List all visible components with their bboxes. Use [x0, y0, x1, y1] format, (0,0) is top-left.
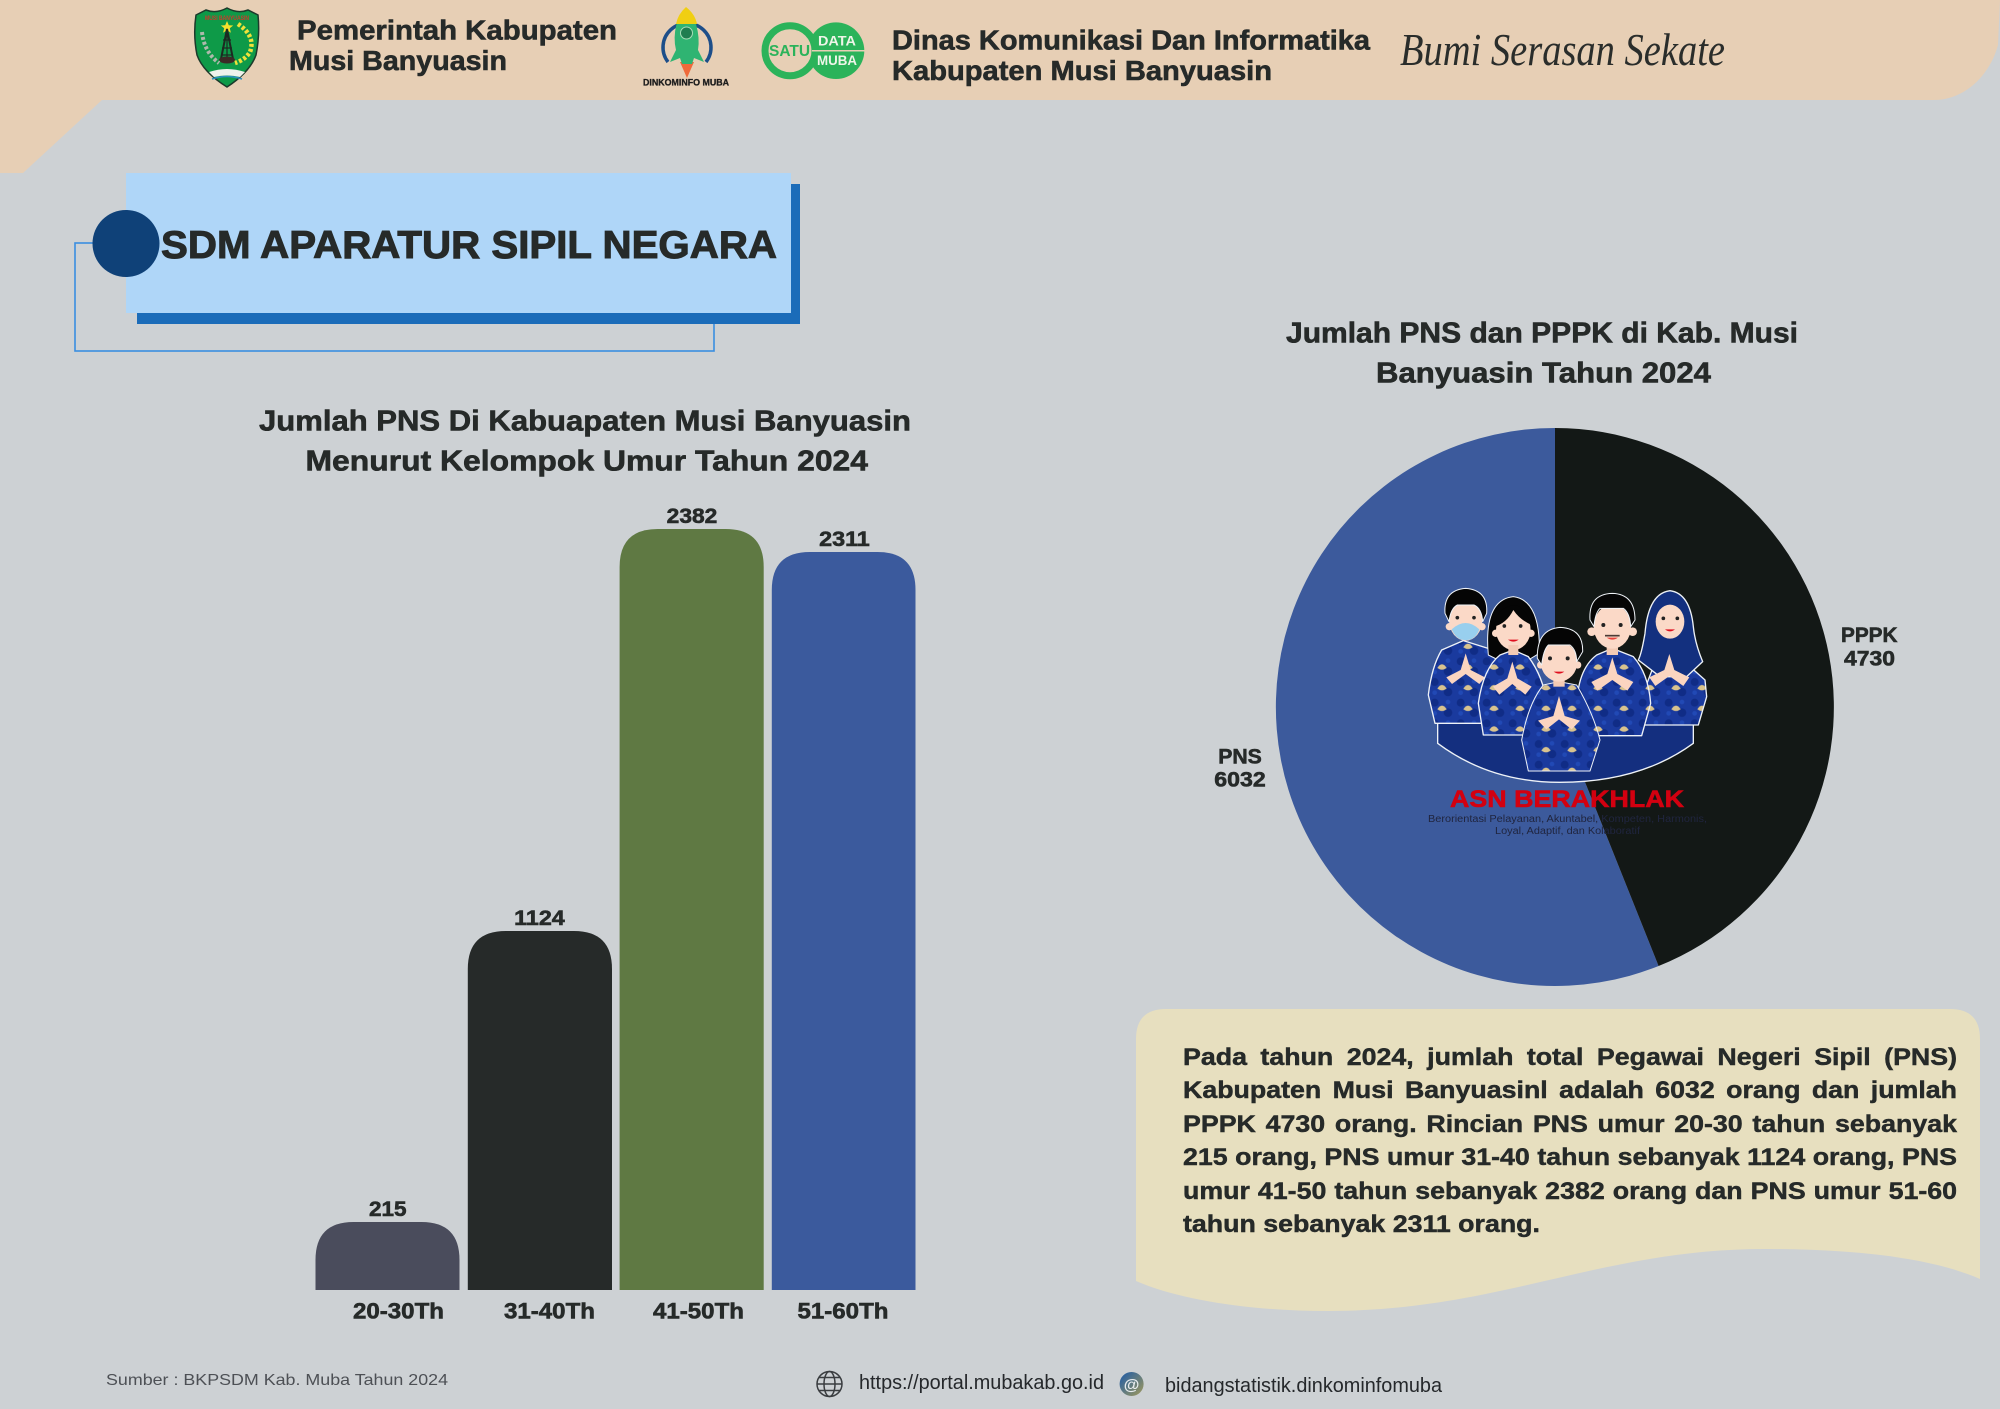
heading: pie chart title: Banyuasin Tahun 2024	[1376, 358, 1711, 390]
icon: Dinkominfo rocket: DINKOMINFO MUBA	[643, 78, 729, 88]
icon: Musi Banyuasin shield	[195, 8, 259, 87]
label: PNS	[1214, 744, 1266, 792]
icon: at sign: @	[1124, 1377, 1139, 1394]
icon: Satu Data Muba	[765, 22, 865, 79]
text block: summary paragraph: Kabupaten Musi Banyuasinl adalah 6032 orang dan jumlah	[1183, 1077, 1957, 1104]
icon: at sign	[1120, 1372, 1144, 1396]
header text: Pemerintah Kabupaten: Pemerintah Kabupaten	[297, 14, 617, 46]
slice: PPPK	[1555, 428, 1834, 966]
label: PNS: PNS	[1218, 744, 1262, 768]
bar 51-60Th: 51-60Th	[798, 1298, 888, 1324]
icon: Satu Data Muba: MUBA	[817, 52, 857, 68]
heading: bar chart title: Menurut Kelompok Umur Tahun 2024	[306, 446, 868, 478]
slice: PNS	[1276, 428, 1659, 986]
bar 41-50Th	[620, 505, 764, 1324]
header motto: Bumi Serasan Sekate	[1400, 24, 1725, 75]
bar 20-30Th: 215	[369, 1198, 407, 1221]
header text: Dinas Komunikasi dan Informatika: Dinas Komunikasi Dan Informatika	[892, 24, 1370, 56]
text block: summary paragraph: PPPK 4730 orang. Rincian PNS umur 20-30 tahun sebanyak	[1183, 1111, 1957, 1138]
bar 31-40Th: 1124	[514, 907, 565, 930]
text block: summary paragraph: umur 41-50 tahun sebanyak 2382 orang dan PNS umur 51-60	[1183, 1178, 1957, 1205]
figure: front man	[1522, 627, 1600, 771]
base	[1438, 717, 1693, 782]
figure: man with moustache	[1577, 593, 1651, 736]
heading: bar chart title: Jumlah PNS Di Kabuapaten Musi Banyuasin	[259, 406, 911, 438]
label: ASN Berakhlak caption	[1428, 786, 1707, 837]
text block: summary paragraph: tahun sebanyak 2311 orang.	[1183, 1211, 1540, 1238]
icon: Dinkominfo rocket	[643, 7, 729, 88]
text block: summary paragraph: 215 orang, PNS umur 31-40 tahun sebanyak 1124 orang, PNS	[1183, 1144, 1957, 1171]
header text: Dinas Komunikasi dan Informatika: Kabupaten Musi Banyuasin	[892, 55, 1272, 86]
panel: main title banner: SDM APARATUR SIPIL NEGARA	[161, 224, 777, 267]
header text: Pemerintah Kabupaten: Musi Banyuasin	[289, 45, 507, 76]
heading: bar chart title	[259, 406, 911, 478]
bar 51-60Th: 2311	[819, 528, 870, 551]
footer source: Sumber : BKPSDM Kab. Muba Tahun 2024	[106, 1372, 448, 1389]
label: ASN Berakhlak caption: Loyal, Adaptif, dan Kolaboratif	[1495, 826, 1640, 837]
text block: summary paragraph: Pada tahun 2024, jumlah total Pegawai Negeri Sipil (PNS)	[1183, 1044, 1957, 1071]
icon: Satu Data Muba: DATA	[818, 32, 856, 48]
bar 41-50Th: 41-50Th	[653, 1298, 744, 1324]
label: PPPK: 4730	[1844, 647, 1895, 671]
label: PPPK	[1841, 623, 1898, 671]
label: ASN Berakhlak caption: ASN BERAKHLAK	[1450, 786, 1685, 813]
illustration: ASN Berakhlak figures	[1428, 588, 1707, 782]
figure: hijab woman	[1638, 591, 1707, 725]
label: ASN Berakhlak caption: Berorientasi Pelayanan, Akuntabel, Kompeten, Harmonis,	[1428, 814, 1707, 825]
header text: Pemerintah Kabupaten	[289, 14, 617, 76]
header band	[0, 0, 2000, 173]
bar 20-30Th	[316, 1198, 460, 1324]
pie chart	[1214, 428, 1898, 986]
heading: pie chart title	[1286, 318, 1798, 390]
footer account: bidangstatistik.dinkominfomuba	[1165, 1375, 1443, 1397]
figure: man with mask	[1428, 588, 1507, 723]
panel: summary box	[1136, 1009, 1980, 1311]
icon: Satu Data Muba: SATU	[769, 43, 810, 60]
bar chart	[316, 505, 916, 1324]
label: PPPK: PPPK	[1841, 623, 1898, 647]
bar 31-40Th: 31-40Th	[504, 1298, 595, 1324]
icon: globe	[817, 1372, 842, 1396]
heading: pie chart title: Jumlah PNS dan PPPK di Kab. Musi	[1286, 318, 1798, 350]
text block: summary paragraph	[1183, 1044, 1958, 1238]
icon: Musi Banyuasin shield: MUSI BANYUASIN	[205, 15, 249, 22]
bar 51-60Th	[772, 528, 916, 1324]
bar 41-50Th: 2382	[667, 505, 717, 528]
bar 20-30Th: 20-30Th	[353, 1298, 444, 1324]
label: PNS: 6032	[1214, 768, 1266, 792]
footer website: https://portal.mubakab.go.id	[859, 1372, 1104, 1394]
figure: woman with long hair	[1478, 597, 1547, 735]
panel: main title banner	[75, 173, 800, 351]
bar 31-40Th	[468, 907, 612, 1324]
header text: Dinas Komunikasi dan Informatika	[892, 24, 1370, 86]
